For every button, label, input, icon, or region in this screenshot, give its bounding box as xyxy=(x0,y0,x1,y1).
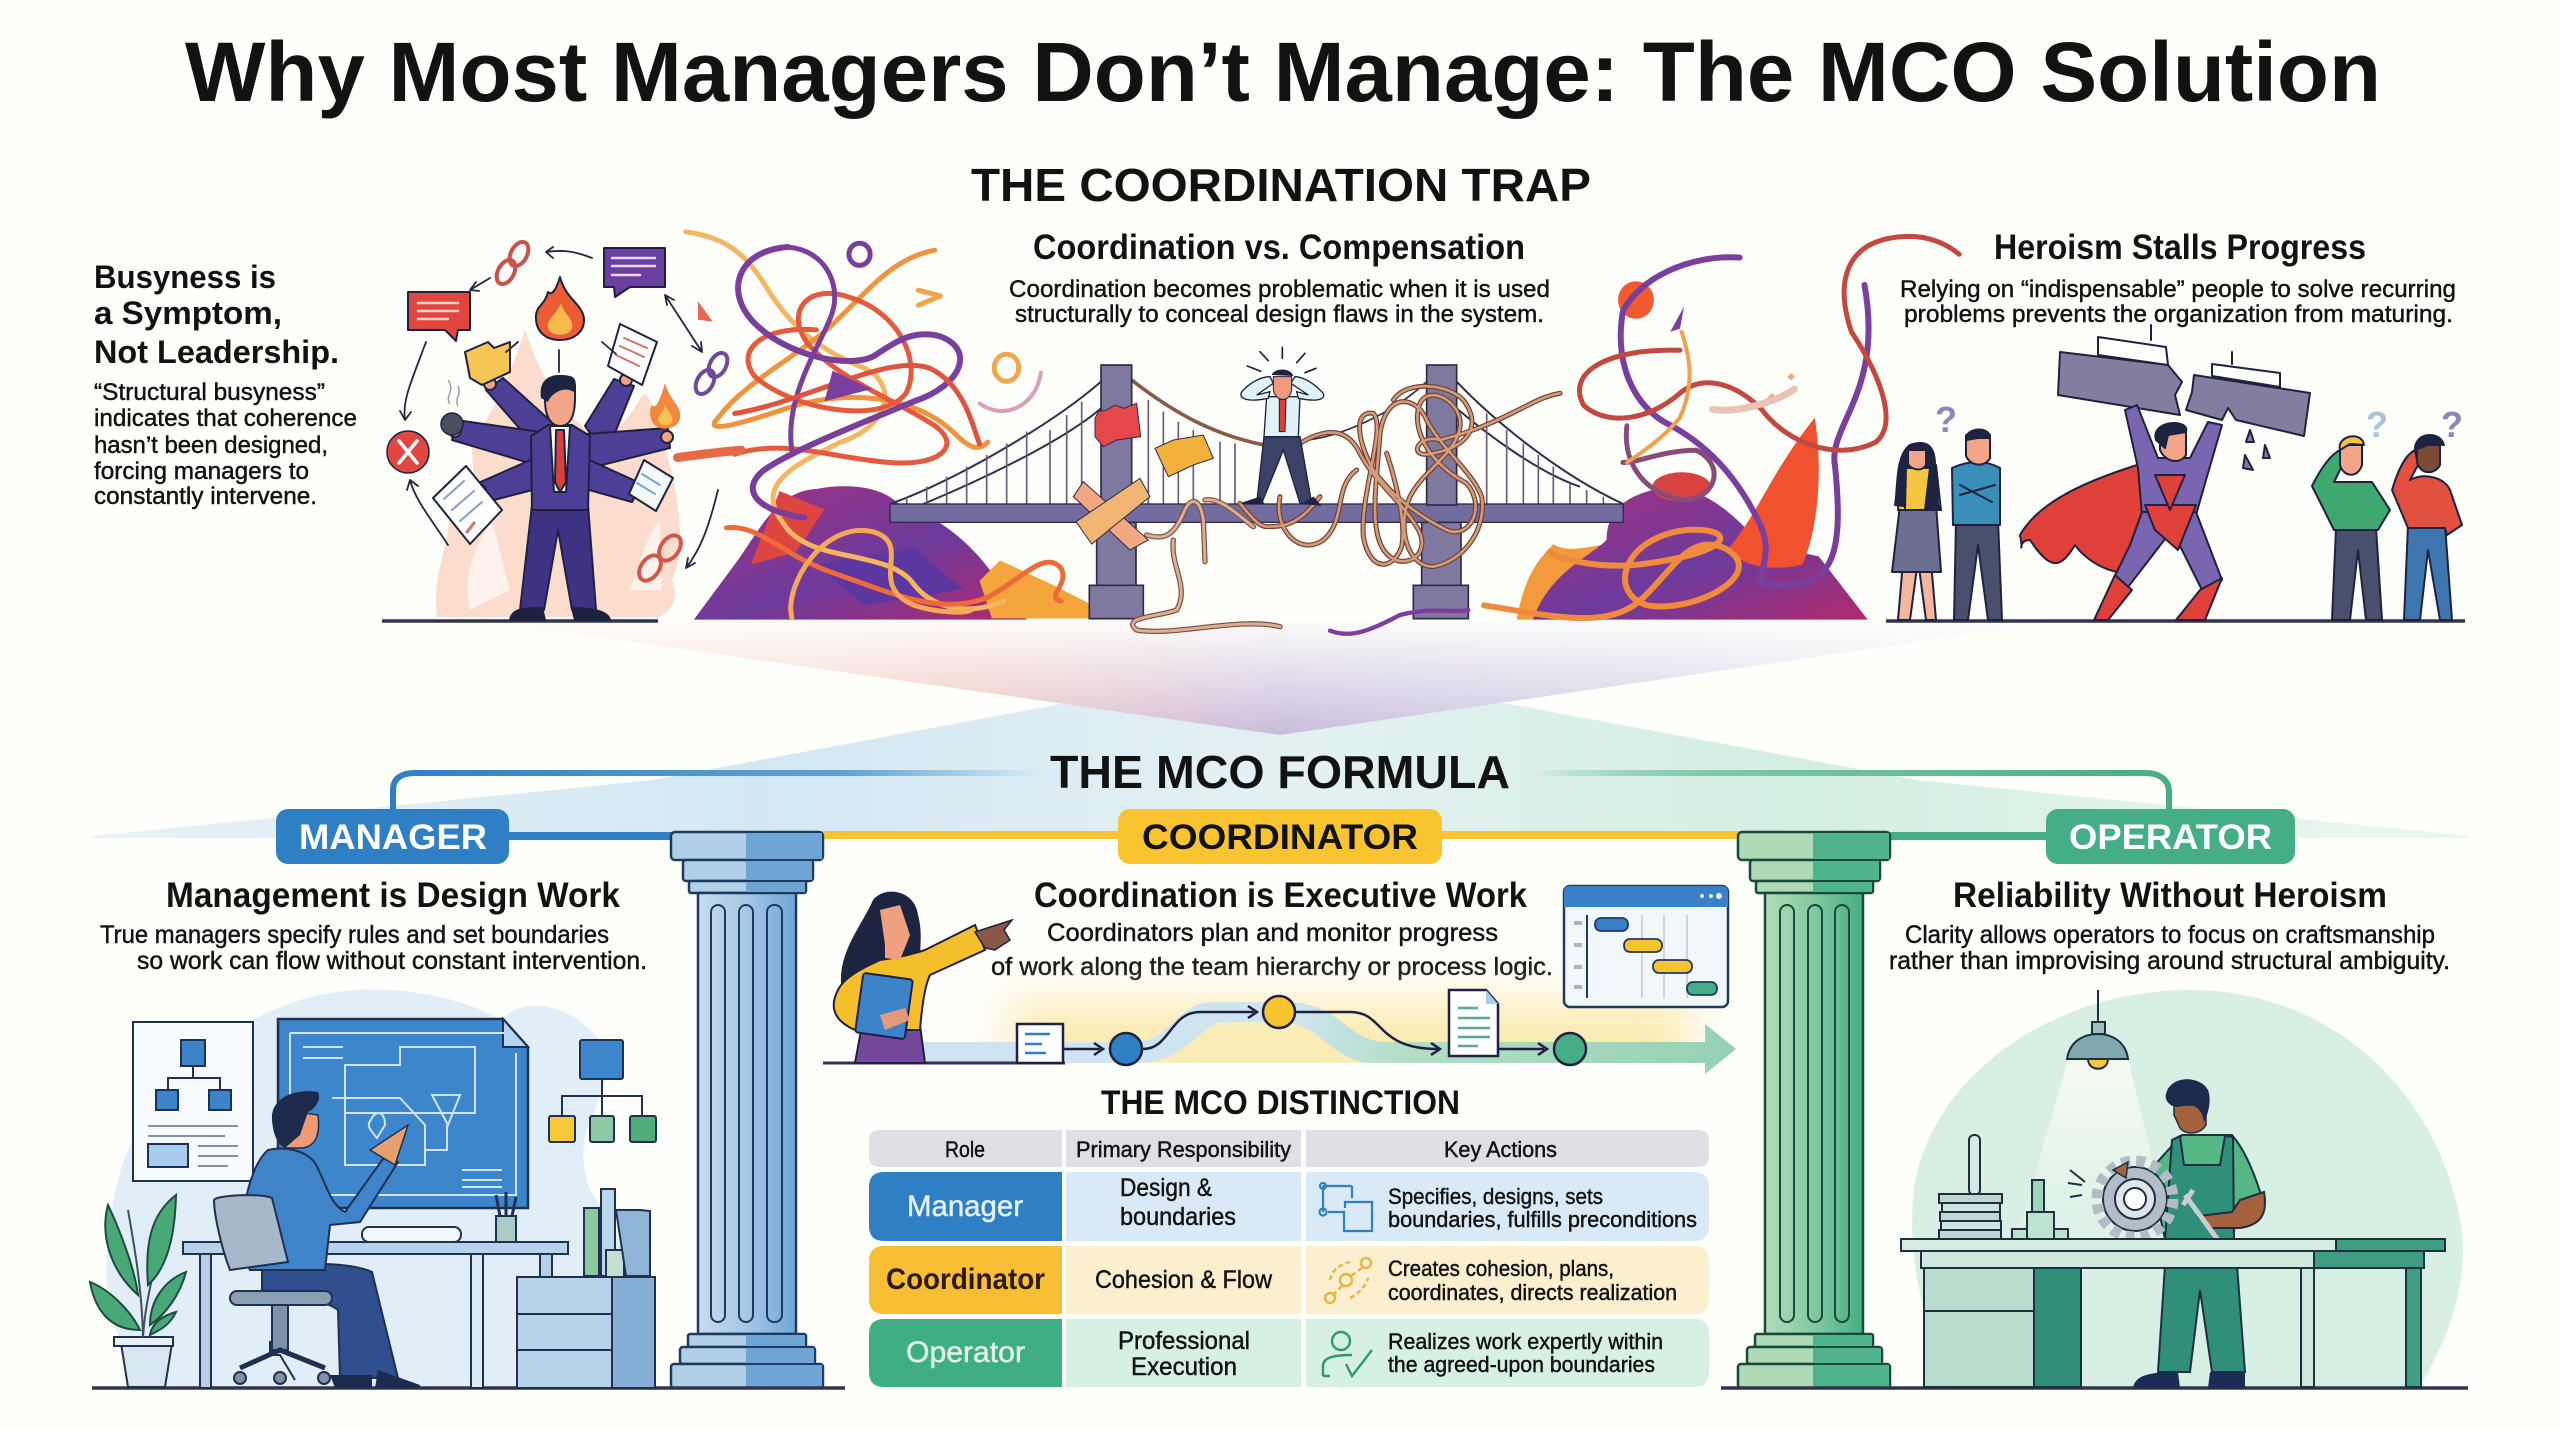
busyness body: hasn’t been designed, xyxy=(94,432,328,459)
head xyxy=(545,385,575,426)
node: green xyxy=(1554,1033,1586,1065)
icon: note xyxy=(629,460,673,511)
illustration: juggling manager xyxy=(382,239,731,621)
illustration: broken bridge xyxy=(890,347,1623,634)
chain links xyxy=(493,239,532,287)
hand and stylus xyxy=(370,1125,408,1165)
row: manager: boundaries, fulfills preconditions xyxy=(1388,1207,1697,1232)
row: operator: Professional xyxy=(1118,1327,1250,1355)
heading: Coordination vs. Compensation xyxy=(1033,228,1525,267)
pill: manager: MANAGER xyxy=(299,818,487,857)
chair xyxy=(234,1240,330,1384)
icon: worker check xyxy=(1323,1332,1372,1376)
question marks: ? xyxy=(2441,404,2463,445)
rope tangle xyxy=(1133,386,1560,634)
orbit arrows xyxy=(400,247,718,568)
busyness body: forcing managers to xyxy=(94,458,309,485)
illustration: woman pointing xyxy=(834,892,1012,1063)
icon: links xyxy=(1325,1258,1371,1303)
text block: busyness xyxy=(94,259,357,510)
question marks: ? xyxy=(1935,399,1957,440)
icon: red chat xyxy=(408,292,470,341)
row: coordinator: Creates cohesion, plans, xyxy=(1388,1256,1614,1281)
hands xyxy=(449,374,673,497)
question marks: ? xyxy=(2366,404,2388,445)
illustration: tangled mess left xyxy=(678,232,1118,620)
row: coordinator: Cohesion & Flow xyxy=(1095,1266,1273,1294)
plant xyxy=(90,1195,186,1387)
cape xyxy=(2020,465,2160,573)
hero xyxy=(2094,405,2222,620)
pill: operator xyxy=(2046,809,2295,864)
body: so work can flow without constant intervention. xyxy=(137,947,647,975)
icon: error circle xyxy=(387,431,429,473)
document 2 xyxy=(1449,990,1498,1056)
body: problems prevents the organization from maturing. xyxy=(1904,301,2453,328)
column: green pillar xyxy=(1738,832,1890,1388)
formula roof background xyxy=(93,663,2470,838)
pill: coordinator xyxy=(1118,809,1442,864)
panel: manager xyxy=(90,876,845,1388)
funnel beam from trap to formula xyxy=(490,621,2060,735)
icon: design xyxy=(1320,1183,1372,1231)
row: operator: Operator xyxy=(906,1336,1025,1369)
illustration: designer at blueprint xyxy=(90,990,845,1388)
formula connector: green xyxy=(1530,773,2169,812)
green sweater man xyxy=(2312,436,2390,620)
body: True managers specify rules and set boundaries xyxy=(100,921,609,949)
icon: bomb in hand xyxy=(441,380,463,435)
woman onlooker xyxy=(1892,443,1941,620)
icon: document xyxy=(608,324,657,385)
torso xyxy=(531,425,590,510)
blueprint xyxy=(278,1019,528,1208)
man: head xyxy=(285,1110,319,1148)
busyness body: indicates that coherence xyxy=(94,405,357,432)
body: Coordination becomes problematic when it is used xyxy=(1009,276,1550,303)
row: manager xyxy=(869,1172,1709,1241)
icon: clipboard xyxy=(433,466,502,544)
formula beam lines xyxy=(505,831,2050,840)
formula connector: blue xyxy=(393,773,1040,812)
question marks xyxy=(1935,399,2463,445)
blue shirt man xyxy=(1952,430,2002,620)
row: manager: boundaries xyxy=(1120,1203,1236,1231)
man: legs xyxy=(262,1264,398,1378)
busyness body: constantly intervene. xyxy=(94,483,317,510)
deck xyxy=(890,504,1623,522)
column: blue pillar xyxy=(671,832,823,1388)
panel: coordinator xyxy=(823,882,1736,1074)
man: torso and arm xyxy=(243,1149,398,1270)
heading: Heroism Stalls Progress xyxy=(1994,228,2366,267)
light beam xyxy=(2016,1060,2172,1240)
busyness heading: Not Leadership. xyxy=(94,334,339,370)
row: manager: Manager xyxy=(907,1190,1023,1223)
row: coordinator: coordinates, directs realization xyxy=(1388,1280,1677,1305)
body: of work along the team hierarchy or process logic. xyxy=(991,953,1553,981)
row: coordinator xyxy=(869,1246,1709,1314)
process flow xyxy=(823,990,1736,1090)
node: blue xyxy=(1110,1033,1142,1065)
pill: coordinator: COORDINATOR xyxy=(1142,818,1418,857)
operator head xyxy=(2174,1105,2206,1133)
table header: Primary Responsibility xyxy=(1076,1137,1291,1162)
title: Why Most Managers Don’t Manage: The MCO Solution xyxy=(185,25,2381,119)
icon: gear xyxy=(2097,1161,2173,1237)
stressed person on bridge xyxy=(1241,347,1324,505)
pill: operator: OPERATOR xyxy=(2069,818,2272,857)
workbench tools xyxy=(1939,1135,2085,1239)
row: manager: Specifies, designs, sets xyxy=(1388,1184,1603,1209)
chair back and seat xyxy=(214,1195,332,1305)
lamp xyxy=(2067,990,2128,1069)
body: rather than improvising around structural ambiguity. xyxy=(1889,947,2450,975)
icon: small flame xyxy=(650,383,680,429)
arms behind xyxy=(452,378,670,502)
suspension cables and hangers xyxy=(890,380,1623,504)
heading: Coordination is Executive Work xyxy=(1034,876,1527,915)
pill: manager xyxy=(276,809,509,864)
body: structurally to conceal design flaws in the system. xyxy=(1015,301,1544,328)
row: coordinator: Coordinator xyxy=(886,1263,1045,1296)
broken slab xyxy=(2058,325,2310,470)
section heading: the mco distinction: THE MCO DISTINCTION xyxy=(1101,1084,1460,1122)
row: operator: Realizes work expertly within xyxy=(1388,1329,1663,1354)
desk xyxy=(183,1189,655,1388)
panel: operator xyxy=(1721,876,2468,1388)
legs xyxy=(520,505,596,610)
gantt window xyxy=(1564,886,1728,1007)
table header xyxy=(869,1130,1709,1167)
row: operator: the agreed-upon boundaries xyxy=(1388,1352,1655,1377)
row: operator: Execution xyxy=(1131,1353,1237,1381)
text block: heroism xyxy=(1900,228,2456,328)
bench xyxy=(1901,1239,2445,1387)
icon: folder xyxy=(465,342,510,385)
table: mco distinction xyxy=(869,1130,1709,1387)
towers xyxy=(1089,365,1468,619)
illustration: hero and onlookers xyxy=(1886,325,2465,621)
section heading: the coordination trap: THE COORDINATION TRAP xyxy=(971,159,1591,211)
icon: purple chat xyxy=(604,248,665,297)
row: operator xyxy=(869,1319,1709,1387)
illustration: tangled mess right xyxy=(1484,236,1959,620)
node: yellow xyxy=(1263,996,1295,1028)
row: manager: Design & xyxy=(1120,1174,1212,1202)
body: Relying on “indispensable” people to solve recurring xyxy=(1900,276,2456,303)
operator torso xyxy=(2150,1135,2262,1239)
body: Coordinators plan and monitor progress xyxy=(1047,919,1498,947)
org chart xyxy=(549,1040,656,1142)
section heading: the mco formula: THE MCO FORMULA xyxy=(1050,746,1510,798)
heading: Reliability Without Heroism xyxy=(1953,876,2387,915)
busyness heading: a Symptom, xyxy=(94,295,282,331)
document 1 xyxy=(1017,1024,1063,1063)
red sweater man xyxy=(2392,435,2462,620)
table header: Key Actions xyxy=(1444,1137,1557,1162)
icon: flame xyxy=(536,277,584,340)
patches xyxy=(1095,403,1141,447)
wall poster xyxy=(133,1022,253,1181)
operator legs xyxy=(2158,1265,2245,1372)
text block: coordination vs compensation xyxy=(1009,228,1550,328)
heading: Management is Design Work xyxy=(166,876,621,915)
illustration: operator at workbench xyxy=(1721,990,2468,1388)
table header: Role xyxy=(945,1137,985,1162)
busyness body: “Structural busyness” xyxy=(94,379,325,406)
busyness heading: Busyness is xyxy=(94,259,276,295)
body: Clarity allows operators to focus on craftsmanship xyxy=(1905,921,2435,949)
